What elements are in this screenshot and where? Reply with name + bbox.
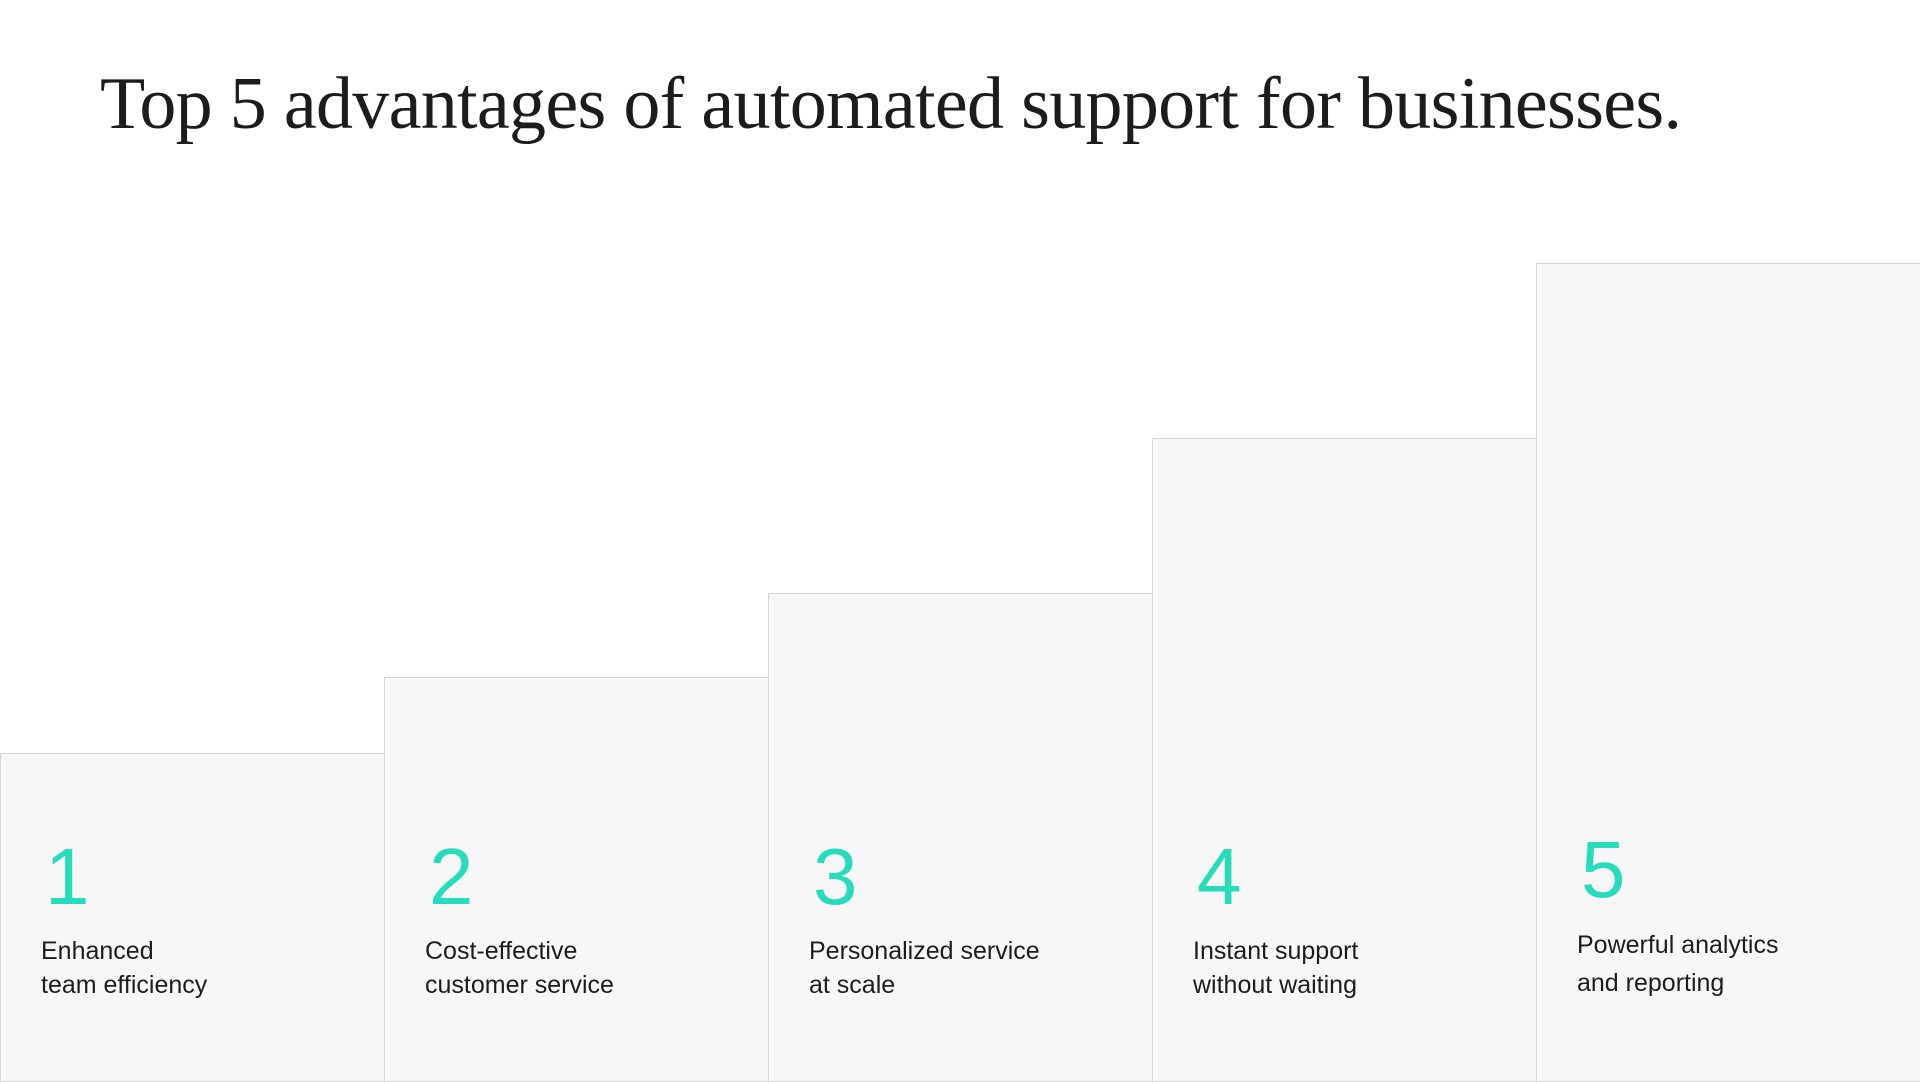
- text 1: Enhanced: [41, 937, 154, 965]
- text 4: without waiting: [1193, 971, 1357, 999]
- text 2: [425, 937, 614, 999]
- number 2: 2: [429, 832, 474, 921]
- text 3: [809, 937, 1040, 999]
- text 5: and reporting: [1577, 969, 1724, 997]
- text 3: at scale: [809, 971, 895, 999]
- card 5: [1536, 263, 1920, 1082]
- text 1: team efficiency: [41, 971, 207, 999]
- number 5: 5: [1581, 825, 1626, 914]
- text 5: Powerful analytics: [1577, 931, 1778, 959]
- number 3: 3: [813, 832, 858, 921]
- title: Top 5 advantages of automated support for businesses.: [100, 63, 1681, 145]
- text 1: [41, 937, 208, 999]
- text 5: [1577, 931, 1778, 997]
- card 1: [0, 753, 385, 1082]
- text 2: customer service: [425, 971, 614, 999]
- text 4: [1193, 937, 1358, 999]
- card 4: [1152, 438, 1537, 1082]
- text 3: Personalized service: [809, 937, 1040, 965]
- number 1: 1: [45, 832, 90, 921]
- text 4: Instant support: [1193, 937, 1358, 965]
- number 4: 4: [1197, 832, 1242, 921]
- text 2: Cost-effective: [425, 937, 577, 965]
- card 3: [768, 593, 1153, 1082]
- card 2: [384, 677, 769, 1082]
